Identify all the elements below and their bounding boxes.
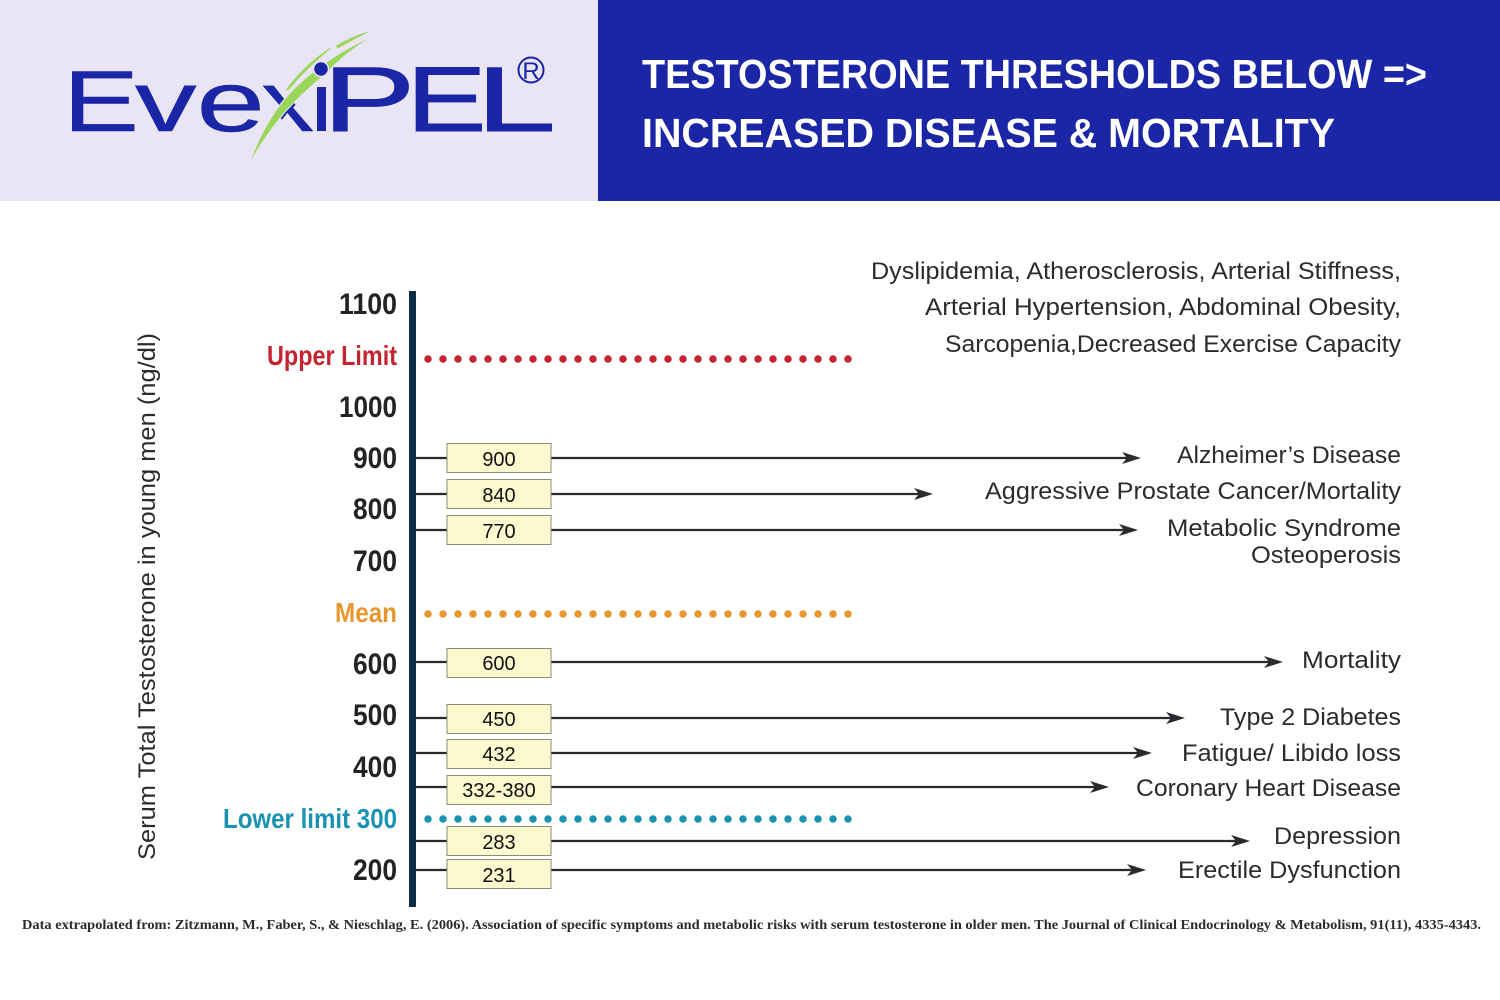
dotted line: mean <box>428 610 850 618</box>
outcome text: cardiovascular group: Sarcopenia,Decreased Exercise Capacity <box>945 331 1401 358</box>
threshold 770: 770 <box>482 521 516 543</box>
outcome labels: Erectile Dysfunction <box>1178 857 1401 884</box>
label: upper limit: Upper Limit <box>267 340 397 371</box>
threshold 231: 231 <box>482 865 516 887</box>
outcome labels: Alzheimer’s Disease <box>1177 442 1401 469</box>
axis scale labels: 600 <box>353 648 397 681</box>
outcome text: cardiovascular group <box>871 258 1401 358</box>
logo wordmark <box>72 56 552 132</box>
logo wordmark: ve <box>135 55 265 150</box>
threshold 432 <box>416 740 1152 768</box>
outcome labels: Mortality <box>1302 647 1401 674</box>
logo wordmark: E <box>63 54 139 150</box>
vertical axis <box>409 291 416 907</box>
y-axis title: Serum Total Testosterone in young men (ng/dl) <box>134 333 161 860</box>
axis scale labels: 800 <box>353 493 397 526</box>
outcome labels <box>985 442 1401 884</box>
axis scale labels <box>339 288 397 887</box>
logo wordmark: R <box>522 58 540 85</box>
threshold 600 <box>416 648 1283 678</box>
threshold 332-380: 332-380 <box>462 780 536 802</box>
axis scale labels: 500 <box>353 699 397 732</box>
logo wordmark: P <box>322 49 416 151</box>
threshold 283 <box>416 826 1250 856</box>
threshold 770 <box>416 516 1138 544</box>
threshold 432: 432 <box>482 744 516 766</box>
threshold 332-380 <box>416 776 1109 804</box>
threshold 231 <box>416 860 1146 888</box>
axis scale labels: 200 <box>353 854 397 887</box>
outcome text: cardiovascular group: Dyslipidemia, Atherosclerosis, Arterial Stiffness, <box>871 258 1401 285</box>
logo wordmark: L <box>476 49 556 151</box>
threshold 840: 840 <box>482 485 516 507</box>
outcome labels: Depression <box>1274 823 1401 850</box>
header panel: logo <box>0 0 598 201</box>
logo wordmark: x <box>261 55 314 150</box>
outcome labels: Metabolic Syndrome <box>1167 515 1401 542</box>
outcome labels: Fatigue/ Libido loss <box>1182 740 1401 767</box>
title text <box>642 51 1427 156</box>
threshold 450: 450 <box>482 709 516 731</box>
header panel: title <box>598 0 1500 201</box>
source citation: Data extrapolated from: Zitzmann, M., Faber, S., & Nieschlag, E. (2006). Association of specific symptoms and metabolic risks with serum testosterone in older men. The Journal of Clinical Endocrinology & Metabolism, 91(11), 4335-4343. <box>22 917 1481 932</box>
dotted line: lower limit <box>428 815 850 823</box>
threshold 283: 283 <box>482 832 516 854</box>
title text: INCREASED DISEASE & MORTALITY <box>642 110 1335 156</box>
logo swoosh <box>248 32 373 166</box>
axis scale labels: 900 <box>353 442 397 475</box>
outcome labels: Coronary Heart Disease <box>1136 775 1401 802</box>
logo wordmark: E <box>406 49 486 151</box>
axis scale labels: 400 <box>353 751 397 784</box>
outcome labels: Type 2 Diabetes <box>1220 704 1401 731</box>
label: mean: Mean <box>335 597 397 628</box>
label: lower limit: Lower limit 300 <box>223 803 397 834</box>
threshold 900: 900 <box>482 449 516 471</box>
threshold 450 <box>416 704 1185 734</box>
threshold 840 <box>416 480 933 508</box>
dotted line: upper limit <box>428 355 850 363</box>
outcome labels: Aggressive Prostate Cancer/Mortality <box>985 478 1401 505</box>
outcome labels: Osteoperosis <box>1251 542 1401 569</box>
title text: TESTOSTERONE THRESHOLDS BELOW => <box>642 51 1427 97</box>
axis scale labels: 1000 <box>339 391 397 424</box>
outcome text: cardiovascular group: Arterial Hypertension, Abdominal Obesity, <box>925 294 1401 321</box>
threshold 900 <box>416 444 1141 472</box>
axis scale labels: 1100 <box>339 288 397 321</box>
threshold 600: 600 <box>482 653 516 675</box>
axis scale labels: 700 <box>353 545 397 578</box>
